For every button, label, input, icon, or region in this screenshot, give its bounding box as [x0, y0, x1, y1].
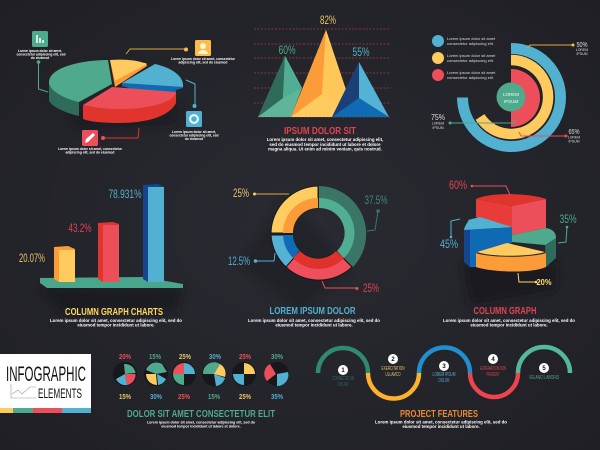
text: green slice note: do eiusmod [31, 56, 49, 60]
step 3: DOLOR [438, 378, 450, 384]
step 5: VELANCI LABORIS [529, 375, 559, 381]
legend: Lorem ipsum dolor sit amet [447, 53, 496, 58]
pie slices [49, 60, 183, 130]
heading: COLUMN GRAPH [474, 305, 536, 317]
label: 55%: 55% [352, 47, 370, 59]
percent labels bottom: 25% [239, 394, 252, 401]
leader: 35%: 35% [560, 214, 576, 226]
panel: 3D pie chart [16, 31, 236, 154]
icon: person badge [195, 40, 211, 56]
text: red slice note: adipiscing elit, sed do eiusmod [66, 150, 114, 154]
text block: eiusmod tempor incididunt ut labore. [470, 322, 548, 328]
icon: chart badge [32, 31, 48, 47]
grid lines [254, 29, 391, 117]
text block [443, 318, 575, 328]
leader: 50%: 50% [576, 42, 588, 49]
percent labels top: 30% [209, 354, 222, 361]
shelf [40, 277, 183, 288]
leader: 20% [518, 273, 552, 287]
leader: green [38, 62, 48, 92]
percent labels top: 15% [149, 354, 162, 361]
leader: 35% [558, 214, 576, 243]
step 1: CONSECTETUR [332, 376, 354, 382]
panel: radial ring chart [431, 35, 588, 146]
step 4 [480, 354, 506, 378]
heading: IPSUM DOLOR SIT [284, 125, 356, 137]
step 2: 2 [391, 357, 395, 363]
leader: red [103, 128, 139, 138]
panel: 3D layered column graph [440, 180, 576, 328]
text block: Lorem ipsum dolor sit amet, consectetur adipiscing elit, sed do [443, 318, 575, 323]
text block: eiusmod tempor incididunt ut labore et dolore. [161, 424, 241, 428]
label: 43.2%: 43.2% [68, 223, 92, 235]
leader: 12.5%: 12.5% [228, 256, 250, 268]
leader: 45%: 45% [440, 239, 458, 251]
percent labels top: 25% [179, 354, 192, 361]
step 4: 4 [491, 357, 495, 363]
leader: 37.5% [364, 195, 388, 231]
label: 60%: 60% [278, 45, 296, 57]
leader: 75% [431, 113, 516, 130]
layer: green [512, 228, 556, 267]
leader: 25% bottom: 25% [363, 283, 379, 295]
leader: 50% [527, 42, 588, 56]
text: blue slice note [169, 130, 219, 141]
text: yellow slice note: adipiscing elit, sed do eiusmod [179, 60, 227, 64]
legend: Lorem ipsum dolor sit amet [447, 36, 496, 41]
step 3: 3 [442, 364, 446, 370]
heading: DOLOR SIT AMET CONSECTETUR ELIT [127, 408, 275, 420]
step 3: LOREM IPSUM [432, 372, 456, 378]
panel: donut chart [228, 186, 388, 328]
step 5 [529, 363, 559, 381]
leader: 25% bottom [322, 281, 379, 295]
label: 20.07%: 20.07% [19, 253, 45, 265]
text block: eiusmod tempor incididunt ut labore. [402, 424, 480, 429]
text block [50, 318, 182, 328]
legend: consectetur adipiscing elit. [447, 58, 494, 63]
legend: Lorem ipsum dolor sit amet [447, 70, 496, 75]
percent labels top: 25% [239, 354, 252, 361]
percent labels top: 20% [119, 354, 132, 361]
leader: blue [186, 80, 195, 106]
leader: 65%: LOREM [568, 136, 580, 140]
center circle [496, 82, 526, 112]
bar: red [98, 222, 119, 282]
text block: sed do eiusmod tempor incididunt ut labore et dolore [269, 142, 381, 147]
icon: mini line chart [11, 384, 36, 398]
text block: Lorem ipsum dolor sit amet, consectetur adipiscing elit, sed do [147, 420, 256, 424]
leader: 65%: 65% [568, 129, 580, 136]
heading: PROJECT FEATURES [400, 408, 478, 420]
text: green slice note: Lorem ipsum dolor sit amet, [18, 49, 62, 53]
leader: 20%: 20% [536, 278, 552, 287]
layer: yellow and orange [476, 243, 546, 272]
badge title: INFOGRAPHIC [6, 363, 86, 386]
step 2 [382, 354, 405, 378]
step 1: DOLOR [338, 382, 349, 388]
leader: 75%: IPSUM [432, 126, 444, 130]
wave arcs [318, 347, 570, 399]
legend: consectetur adipiscing elit. [447, 75, 494, 80]
layer: blue [464, 217, 512, 267]
step 4: PROIDENT [486, 372, 500, 378]
text block: magna aliqua. Ut enim ad minim veniam, quis nostrud. [268, 146, 382, 152]
ring: blue [462, 48, 560, 146]
text: red slice note: Lorem ipsum dolor sit amet, consectetur [58, 147, 123, 151]
heading: COLUMN GRAPH CHARTS [65, 306, 163, 318]
text block [147, 420, 256, 428]
percent labels top [119, 354, 284, 361]
ring: yellow [480, 60, 548, 134]
center circle: LOREM [503, 92, 519, 97]
text block: Lorem ipsum dolor sit amet, consectetur adipiscing elit, [267, 137, 383, 142]
percent labels bottom: 25% [178, 394, 191, 401]
step 2: EXERCITATION [382, 366, 405, 372]
step 3 [432, 361, 456, 384]
text: blue slice note: consectetur adipiscing elit, sed [169, 134, 219, 138]
icon: gear badge [186, 111, 202, 127]
leader: 25% top: 25% [233, 188, 249, 200]
leader: 65% [519, 129, 580, 144]
text block [375, 420, 507, 429]
percent labels top: 30% [271, 354, 284, 361]
leader: 45% [440, 219, 460, 251]
leader: 75%: 75% [431, 113, 445, 122]
percent labels bottom [119, 394, 284, 401]
panel: infographic elements badge [0, 354, 91, 413]
center circle: IPSUM [504, 99, 518, 104]
text: red slice note [58, 147, 123, 154]
shadow [40, 288, 183, 312]
bar: blue [143, 184, 164, 282]
leader: 37.5%: 37.5% [364, 195, 388, 207]
colour strip [0, 408, 91, 413]
text: yellow slice note [171, 57, 236, 64]
label: 82%: 82% [320, 15, 336, 27]
step 2: ULLAMCO [386, 372, 401, 378]
leader: 60%: 60% [449, 180, 467, 192]
percent labels bottom: 15% [208, 394, 221, 401]
text: blue slice note: Lorem ipsum dolor sit amet, [172, 130, 216, 134]
percent labels bottom: 15% [119, 394, 132, 401]
leader: 50%: IPSUM [576, 52, 588, 56]
panel: small pie charts [113, 354, 289, 428]
text block [248, 318, 380, 328]
ring: red [511, 69, 540, 127]
text block: eiusmod tempor incididunt ut labore. [77, 322, 155, 328]
step 4: EXPERIATION NON [480, 366, 506, 372]
long shadow [240, 195, 350, 310]
leader: 60% [449, 180, 510, 195]
percent labels bottom: 30% [150, 394, 163, 401]
text block: Lorem ipsum dolor sit amet, consectetur adipiscing elit, sed do [248, 318, 380, 323]
step 5: 5 [542, 366, 546, 372]
pyramid: orange [291, 30, 346, 117]
pie row [113, 362, 289, 386]
leader: 50%: LOREM [576, 48, 588, 52]
step 1 [332, 365, 354, 388]
text block: Lorem ipsum dolor sit amet, consectetur adipiscing elit, sed do [50, 318, 182, 323]
shadow [462, 262, 556, 305]
label: 78.931%: 78.931% [108, 189, 142, 201]
badge subtitle: ELEMENTS [38, 386, 82, 401]
legend: consectetur adipiscing elit. [447, 41, 494, 46]
leader: 12.5% [228, 253, 275, 268]
heading: LOREM IPSUM DOLOR [270, 305, 356, 317]
text block: Lorem ipsum dolor sit amet, consectetur adipiscing elit, sed do [375, 420, 507, 424]
leader: 75%: LOREM [432, 122, 444, 126]
text: green slice note [16, 49, 66, 60]
step 1: 1 [341, 368, 345, 374]
layer: red [476, 194, 546, 235]
panel: pyramid chart [254, 15, 391, 152]
text block [267, 137, 383, 152]
icon: pencil badge [82, 130, 98, 146]
leader: 65%: IPSUM [568, 140, 580, 144]
text: green slice note: consectetur adipiscing elit, sed [16, 52, 66, 56]
pyramid: blue [332, 62, 389, 117]
percent labels bottom: 35% [271, 394, 284, 401]
text block: eiusmod tempor incididunt ut labore. [275, 322, 353, 328]
donut segments [271, 186, 366, 280]
text: yellow slice note: Lorem ipsum dolor sit amet, consectetur [171, 57, 236, 61]
bar: yellow [54, 246, 75, 282]
legend [432, 35, 496, 81]
leader: yellow [126, 49, 186, 54]
leader: 25% top [233, 188, 289, 200]
panel: column graph charts [19, 184, 183, 328]
panel: project features wave [318, 347, 570, 429]
text: blue slice note: do eiusmod [185, 137, 203, 141]
pyramid: green [258, 56, 302, 117]
